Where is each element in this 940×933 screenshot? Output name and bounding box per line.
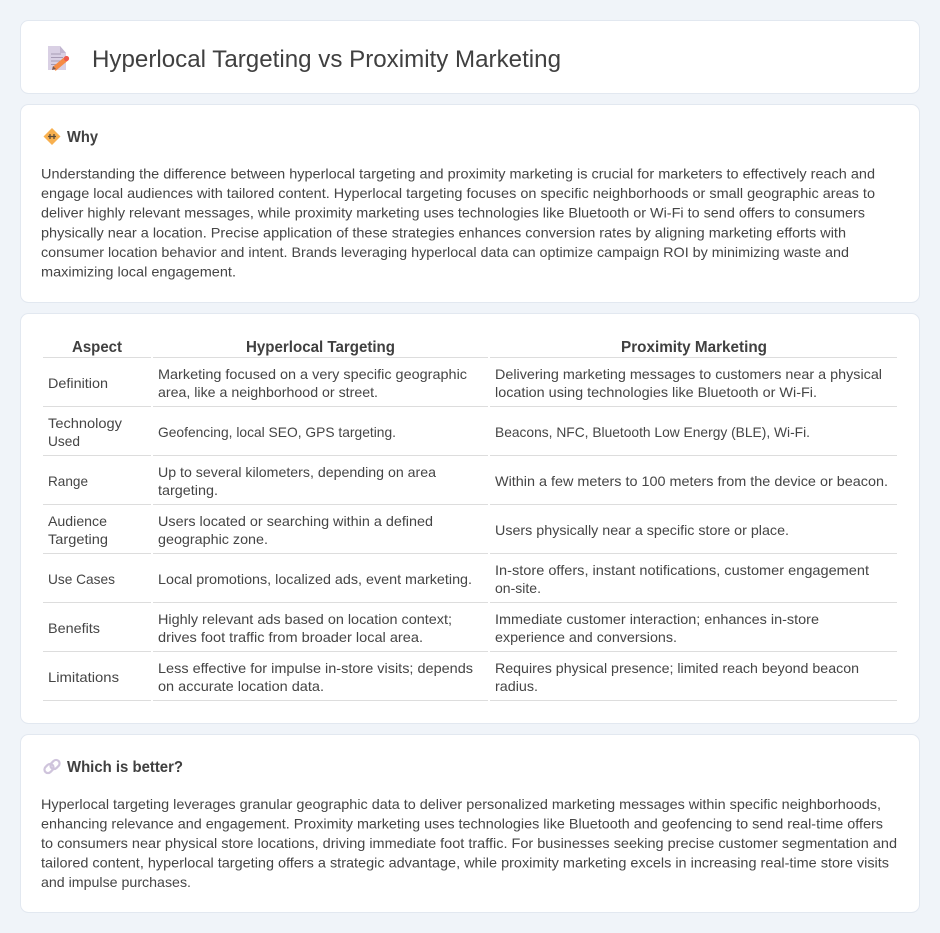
row: audience targeting: Users physically near a specific store or place. — [495, 522, 789, 538]
table rules — [43, 358, 897, 700]
row: audience targeting — [48, 513, 789, 547]
panel: comparison table — [20, 314, 920, 724]
row: definition: area, like a neighborhood or street. — [158, 384, 378, 400]
row: audience targeting: Targeting — [48, 531, 108, 547]
row: definition: Definition — [48, 375, 108, 391]
row: audience targeting: geographic zone. — [158, 531, 268, 547]
panel: which is better — [20, 734, 920, 912]
row: benefits: drives foot traffic from broader local area. — [158, 629, 423, 645]
row: limitations — [48, 660, 859, 694]
row: definition: Delivering marketing messages to customers near a physical — [495, 366, 882, 382]
row: definition: Marketing focused on a very specific geographic — [158, 366, 467, 382]
row: benefits — [48, 611, 819, 645]
table header: Hyperlocal Targeting — [246, 339, 395, 356]
which is better paragraph: enhancing relevance and engagement. Proximity marketing uses technologies like Bluetooth and geofencing to send real-time offers — [41, 816, 883, 832]
row: range: targeting. — [158, 482, 218, 498]
row: range — [48, 464, 888, 498]
row: audience targeting: Audience — [48, 513, 107, 529]
table header: Aspect — [72, 339, 123, 356]
why paragraph: deliver highly relevant messages, while proximity marketing uses technologies like Bluetooth or Wi-Fi to send offers to consumers — [41, 205, 865, 221]
why paragraph: engage local audiences with tailored content. Hyperlocal targeting focuses on specific neighborhoods or small geographic areas to — [41, 185, 875, 201]
which is better paragraph: and impulse purchases. — [41, 874, 191, 890]
row: benefits: Highly relevant ads based on location context; — [158, 611, 452, 627]
row: technology used — [48, 415, 810, 449]
row: definition — [48, 366, 882, 400]
row: audience targeting: Users located or searching within a defined — [158, 513, 433, 529]
why paragraph — [41, 166, 875, 280]
row: use cases: on-site. — [495, 580, 541, 596]
icon: warning diamond — [44, 128, 60, 145]
panel: title header — [20, 20, 920, 94]
row: range: Up to several kilometers, depending on area — [158, 464, 436, 480]
which is better paragraph: Hyperlocal targeting leverages granular geographic data to deliver personalized marketing messages within specific neighborhoods, — [41, 796, 881, 812]
row: limitations: on accurate location data. — [158, 678, 324, 694]
row: technology used: Geofencing, local SEO, GPS targeting. — [158, 424, 396, 440]
icon: link — [43, 758, 61, 775]
row: use cases — [48, 562, 869, 596]
why paragraph: physically near a location. Precise application of these strategies enhances conversion rates by aligning marketing efforts with — [41, 224, 846, 240]
row: limitations: Less effective for impulse in-store visits; depends — [158, 660, 473, 676]
title: Hyperlocal Targeting vs Proximity Marketing — [92, 46, 561, 73]
why paragraph: maximizing local engagement. — [41, 264, 236, 280]
table header — [72, 339, 767, 356]
row: limitations: Requires physical presence; limited reach beyond beacon — [495, 660, 859, 676]
which is better paragraph: tailored content, hyperlocal targeting offers a strategic advantage, while proximity marketing excels in increasing real-time store visits — [41, 854, 889, 870]
which is better paragraph — [41, 796, 897, 890]
heading: which is better: Which is better? — [67, 759, 183, 776]
table header: Proximity Marketing — [621, 339, 767, 356]
row: use cases: In-store offers, instant notifications, customer engagement — [495, 562, 869, 578]
row: definition: location using technologies like Bluetooth or Wi-Fi. — [495, 384, 817, 400]
row: range: Range — [48, 473, 88, 489]
which is better paragraph: to consumers near physical store locations, driving immediate foot traffic. For businesses seeking precise customer segmentation and — [41, 835, 897, 851]
row: benefits: Benefits — [48, 620, 100, 636]
row: benefits: Immediate customer interaction; enhances in-store — [495, 611, 819, 627]
row: technology used: Beacons, NFC, Bluetooth Low Energy (BLE), Wi-Fi. — [495, 424, 810, 440]
row: limitations: Limitations — [48, 669, 119, 685]
heading: why: Why — [67, 129, 98, 146]
icon: document with pencil — [48, 46, 69, 70]
row: range: Within a few meters to 100 meters from the device or beacon. — [495, 473, 888, 489]
row: limitations: radius. — [495, 678, 538, 694]
row: benefits: experience and conversions. — [495, 629, 677, 645]
panel: why — [20, 104, 920, 302]
row: technology used: Used — [48, 433, 80, 449]
row: use cases: Local promotions, localized ads, event marketing. — [158, 571, 472, 587]
why paragraph: consumer location behavior and intent. Brands leveraging hyperlocal data can optimize campaign ROI by minimizing waste and — [41, 244, 849, 260]
row: use cases: Use Cases — [48, 571, 115, 587]
why paragraph: Understanding the difference between hyperlocal targeting and proximity marketing is crucial for marketers to effectively reach and — [41, 166, 875, 182]
row: technology used: Technology — [48, 415, 122, 431]
